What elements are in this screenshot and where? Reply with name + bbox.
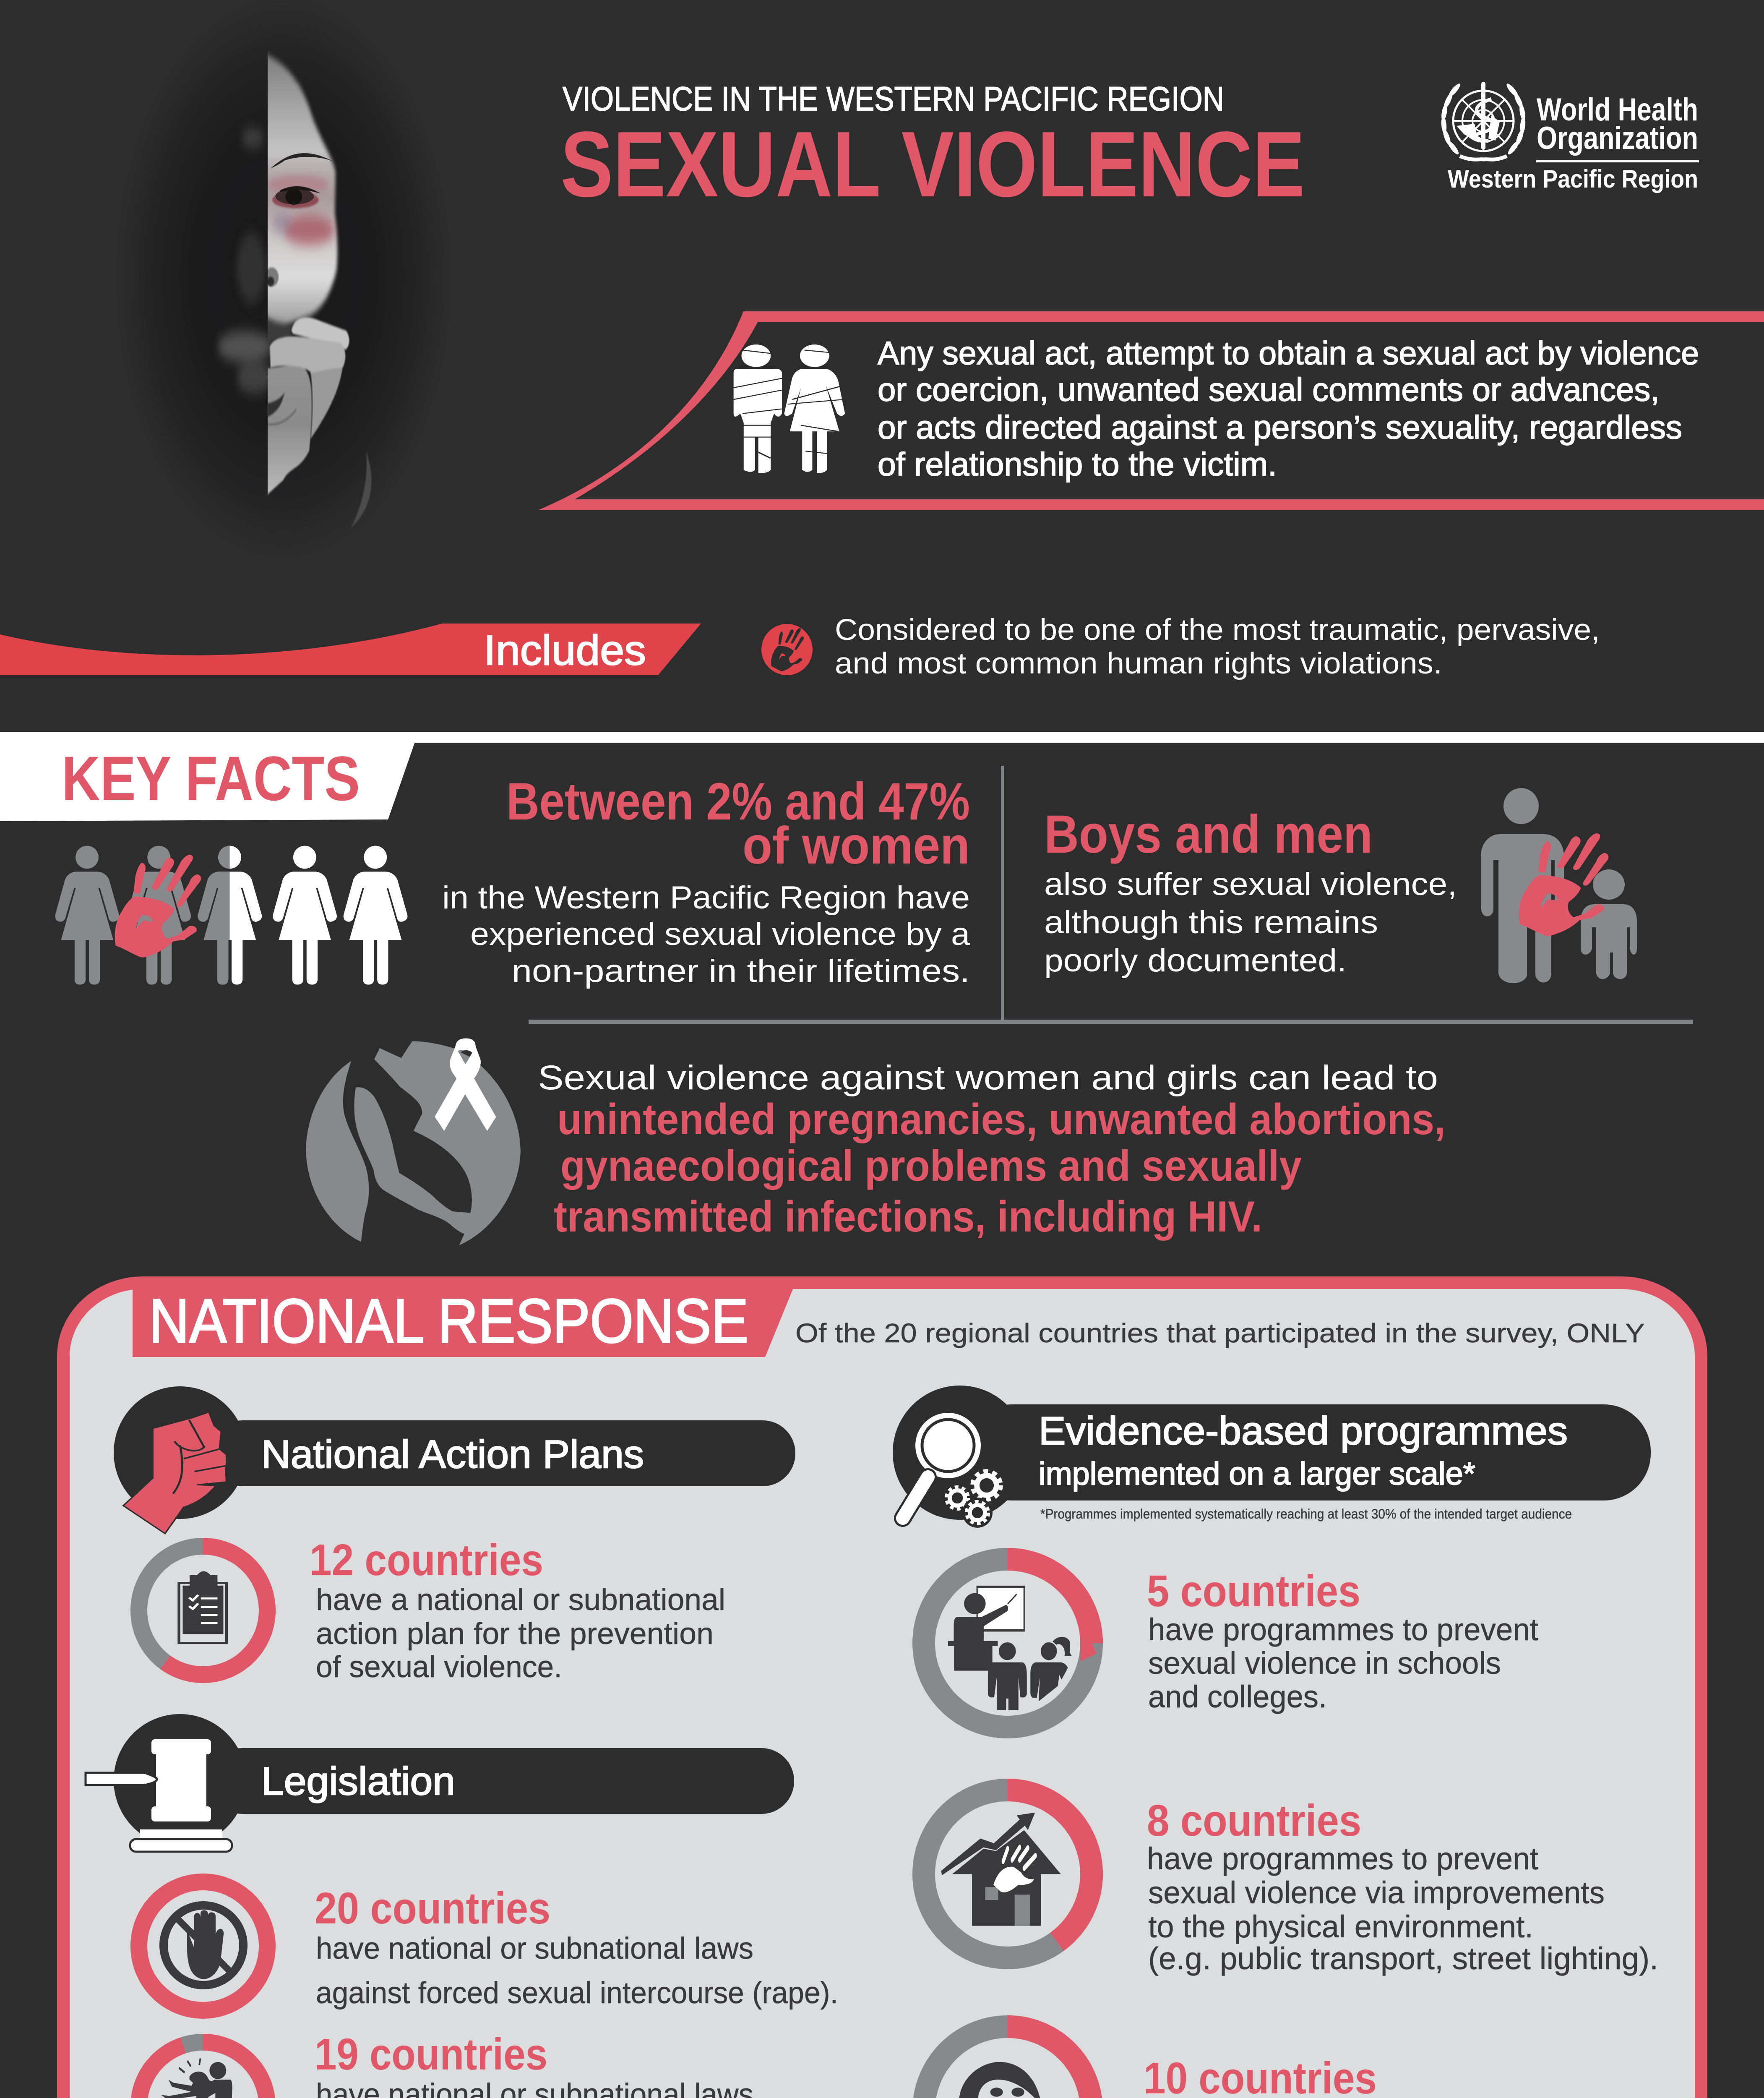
WHO logo: Organization xyxy=(1537,120,1698,156)
donut chart: 19 of 20 countries, contact violence xyxy=(139,2042,267,2098)
survey intro: Of the 20 regional countries that participated in the survey, ONLY xyxy=(795,1318,1645,1348)
WHO logo xyxy=(1441,82,1699,193)
heading pill: Evidence-based programmes xyxy=(893,1386,1651,1528)
definition text: or acts directed against a person’s sexuality, regardless xyxy=(878,409,1682,446)
stat: 5 countries: have programmes to prevent xyxy=(1148,1612,1538,1647)
icon: hand print in red circle xyxy=(761,624,813,675)
fact: health consequences: unintended pregnancies, unwanted abortions, xyxy=(557,1095,1446,1144)
stat: 20 countries: have national or subnational laws xyxy=(316,1932,753,1965)
heading: Key Facts: KEY FACTS xyxy=(62,743,360,814)
icon: five women, 2 percent to 47 percent, with hand print xyxy=(55,846,407,985)
fact: between 2% and 47% of women xyxy=(442,772,970,989)
stat: 20 countries: 20 countries xyxy=(315,1884,550,1933)
panel background with pink border xyxy=(63,1283,1701,2098)
heading pill: National Action Plans: National Action Plans xyxy=(261,1432,644,1476)
stat: 8 countries: 8 countries xyxy=(1147,1796,1361,1845)
stat: 19 countries: 19 countries xyxy=(315,2030,547,2079)
fact: health consequences: gynaecological problems and sexually xyxy=(560,1142,1302,1190)
fact: between 2% and 47% of women: of women xyxy=(743,817,970,875)
heading pill: National Action Plans xyxy=(114,1386,795,1534)
donut chart: 10 of 20 countries, gender norms xyxy=(924,2027,1092,2098)
stat: 8 countries: (e.g. public transport, street lighting). xyxy=(1148,1941,1658,1976)
human rights statement: and most common human rights violations. xyxy=(835,647,1442,680)
logo wordmark: World Health xyxy=(1537,92,1698,128)
stat: 5 countries: 5 countries xyxy=(1147,1566,1360,1616)
stat: 12 countries: 12 countries xyxy=(310,1535,543,1585)
fact: boys and men xyxy=(1044,804,1457,979)
human rights statement: Considered to be one of the most traumatic, pervasive, xyxy=(835,613,1600,647)
icon: clipboard checklist xyxy=(179,1571,227,1643)
stat: 8 countries: sexual violence via improvements xyxy=(1148,1875,1605,1910)
fact: health consequences xyxy=(538,1059,1446,1241)
stat: 5 countries xyxy=(1147,1566,1538,1714)
curved pink frame xyxy=(538,311,1764,510)
icon: magnifying glass with gears xyxy=(903,1413,1000,1528)
icon: bound man and woman xyxy=(734,344,845,473)
human rights statement xyxy=(835,613,1600,680)
fact: between 2% and 47% of women: experienced sexual violence by a xyxy=(470,916,970,952)
icon: prohibited hand xyxy=(164,1905,243,1985)
icon: house with hand print and rising arrow xyxy=(941,1813,1061,1926)
stat: 20 countries: against forced sexual intercourse (rape). xyxy=(316,1976,838,2010)
stat: 20 countries xyxy=(315,1884,838,2010)
icon: female reproductive silhouette with white ribbon xyxy=(306,1039,521,1245)
stat: 8 countries: to the physical environment. xyxy=(1148,1909,1533,1944)
definition panel xyxy=(538,311,1764,510)
definition text: of relationship to the victim. xyxy=(878,446,1277,483)
icon: man and boy with hand print xyxy=(1481,788,1637,983)
WHO logo: Western Pacific Region xyxy=(1448,165,1698,193)
stat: 12 countries: action plan for the prevention xyxy=(316,1617,714,1651)
fact: boys and men: also suffer sexual violence, xyxy=(1044,866,1457,902)
photo: half-shadowed bruised face of a woman xyxy=(115,0,452,560)
section title: Violence in the Western Pacific Region: VIOLENCE IN THE WESTERN PACIFIC REGION xyxy=(563,80,1224,118)
stat: 5 countries: sexual violence in schools xyxy=(1148,1646,1501,1680)
definition text: Any sexual act, attempt to obtain a sexual act by violence xyxy=(878,334,1699,371)
main title: Sexual Violence: SEXUAL VIOLENCE xyxy=(560,112,1305,217)
donut chart: 5 of 20 countries, schools xyxy=(924,1559,1092,1727)
panel: national response xyxy=(63,1283,1701,2098)
fact: between 2% and 47% of women: in the Western Pacific Region have xyxy=(442,880,970,916)
heading tab: National Response: NATIONAL RESPONSE xyxy=(149,1286,748,1356)
banner: Includes: Includes xyxy=(484,627,646,674)
icon: WHO emblem xyxy=(1453,84,1514,159)
fact: between 2% and 47% of women: non-partner in their lifetimes. xyxy=(512,953,970,989)
stat: 5 countries: and colleges. xyxy=(1148,1679,1327,1714)
heading pill: Legislation xyxy=(86,1714,794,1852)
fact: between 2% and 47% of women: Between 2% and 47% xyxy=(506,772,970,831)
fact: health consequences: transmitted infections, including HIV. xyxy=(554,1193,1262,1241)
donut chart: 12 of 20 countries, action plans xyxy=(139,1546,267,1675)
stat: 12 countries: of sexual violence. xyxy=(316,1650,562,1684)
stat: 8 countries: have programmes to prevent xyxy=(1147,1841,1538,1876)
stat: 12 countries xyxy=(310,1535,725,1684)
stat: 12 countries: have a national or subnational xyxy=(316,1583,725,1617)
heading pill: Evidence-based programmes: Evidence-based programmes xyxy=(1039,1409,1568,1453)
fact: boys and men: although this remains xyxy=(1044,905,1378,940)
fact: boys and men: poorly documented. xyxy=(1044,943,1347,979)
definition text xyxy=(878,334,1699,483)
banner: Includes xyxy=(0,624,701,675)
icon: gavel xyxy=(86,1739,232,1852)
heading pill: Evidence-based programmes: implemented on a larger scale* xyxy=(1039,1456,1475,1492)
icon: couple with cycling arrows xyxy=(948,2062,1066,2098)
icon: teacher and students xyxy=(948,1587,1072,1710)
footnote: *Programmes implemented systematically reaching at least 30% of the intended target audience xyxy=(1040,1506,1572,1521)
icon: raised fist xyxy=(123,1412,227,1534)
white section band with Key Facts tab xyxy=(0,732,1764,821)
donut chart: 20 of 20 countries, rape laws xyxy=(139,1882,267,2010)
fact: boys and men: Boys and men xyxy=(1044,804,1373,864)
stat: 19 countries xyxy=(315,2030,753,2098)
fact: health consequences: Sexual violence against women and girls can lead to xyxy=(538,1059,1438,1097)
donut chart: 8 of 20 countries, physical environment xyxy=(924,1790,1092,1958)
icon: red hand print over women xyxy=(115,855,201,958)
stat: 8 countries xyxy=(1147,1796,1658,1976)
heading pill: Legislation: Legislation xyxy=(261,1759,455,1803)
definition text: or coercion, unwanted sexual comments or advances, xyxy=(878,371,1660,408)
icon: man grabbing woman xyxy=(161,2058,235,2098)
